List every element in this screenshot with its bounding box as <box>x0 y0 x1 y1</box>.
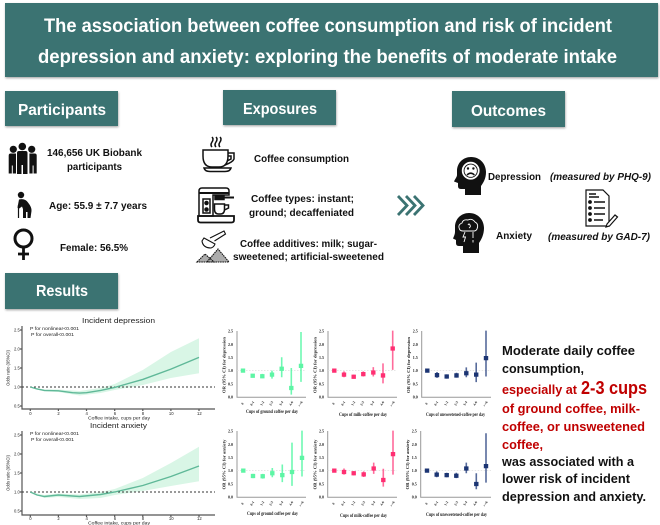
chart: unsweetened coffee, anxiety: 0-1 <box>433 500 439 506</box>
icon: scoop and sugar <box>197 231 229 262</box>
chart: unsweetened coffee, anxiety: 3-4 <box>462 500 468 506</box>
conclusion text block: consumption, <box>502 361 584 376</box>
chart: milk coffee, anxiety: 2.5 <box>319 428 324 434</box>
chart: incident anxiety spline: 10 <box>169 516 174 521</box>
text: PHQ-9 measure: (measured by PHQ-9) <box>550 172 652 183</box>
text: depression: Depression <box>488 172 541 183</box>
chart: unsweetened coffee, anxiety: OR (95% CI) for anxiety <box>405 439 410 490</box>
chart: unsweetened coffee, anxiety <box>405 428 491 518</box>
chart: incident depression spline: 2.5 <box>14 328 20 332</box>
conclusion text block: of ground coffee, milk- <box>502 401 640 416</box>
text: anxiety: Anxiety <box>496 231 532 242</box>
heading: outcomes <box>452 91 565 127</box>
chart: milk coffee, anxiety: 0-1 <box>340 500 346 506</box>
chart: incident anxiety spline: 4 <box>86 516 88 521</box>
chart: ground coffee, anxiety: OR (95% CI) for anxiety <box>222 439 227 490</box>
chart: milk coffee, depression: 0 <box>331 402 336 406</box>
conclusion text block: coffee, or unsweetened <box>502 419 645 434</box>
chart: ground coffee, anxiety: 2.0 <box>228 442 233 447</box>
chart: incident anxiety spline: 6 <box>114 516 117 521</box>
chart: unsweetened coffee, depression: 1.5 <box>413 355 418 360</box>
chart: incident depression spline: 2 <box>57 411 60 416</box>
chart: incident depression spline: 10 <box>169 411 174 416</box>
chart: unsweetened coffee, depression: OR (95% CI) for depression <box>406 336 411 393</box>
chart: ground coffee, depression: 0.0 <box>228 395 233 400</box>
text: age: Age: 55.9 ± 7.7 years <box>49 201 147 212</box>
chart: unsweetened coffee, anxiety: Cups of unsweetened-coffee per day <box>426 512 487 518</box>
conclusion text block: lower risk of incident <box>502 471 631 486</box>
chart: ground coffee, depression: >=6 <box>297 400 304 408</box>
chart: unsweetened coffee, depression: 0.0 <box>413 395 418 400</box>
chart: incident depression spline <box>6 316 215 420</box>
heading: exposures <box>223 90 336 125</box>
chart: incident anxiety spline: 1.0 <box>14 490 20 494</box>
chart: ground coffee, depression: 0.5 <box>228 381 233 386</box>
chart: ground coffee, depression: OR (95% CI) for depression <box>222 336 227 393</box>
chart: incident depression spline: P for overall<0.001 <box>31 332 75 337</box>
chart: milk coffee, anxiety: 0 <box>331 502 336 506</box>
chart: milk coffee, anxiety: 4-6 <box>379 500 385 506</box>
chart: ground coffee, depression: 3-4 <box>278 400 284 406</box>
chart: incident anxiety spline: P for nonlinear<0.001 <box>30 431 80 436</box>
chart: milk coffee, depression <box>312 328 397 418</box>
chart: incident depression spline: Odds ratio (95%CI) <box>6 349 10 386</box>
chart: milk coffee, depression: 3-4 <box>369 400 375 406</box>
chart: unsweetened coffee, depression: 2.5 <box>413 328 418 334</box>
chart: unsweetened coffee, anxiety: >=6 <box>482 500 489 508</box>
chart: unsweetened coffee, anxiety: 2-3 <box>453 500 459 506</box>
chart: incident depression spline: 4 <box>86 411 88 416</box>
chart: incident depression spline: 2.0 <box>14 346 20 352</box>
chart: unsweetened coffee, depression: 3-4 <box>462 400 468 406</box>
chart: milk coffee, anxiety: OR (95% CI) for anxiety <box>312 439 318 490</box>
chart: milk coffee, depression: 2-3 <box>359 400 365 406</box>
chart: ground coffee, depression: 2-3 <box>268 400 274 406</box>
chart: milk coffee, anxiety: 2.0 <box>319 442 324 447</box>
chart: incident anxiety spline: 0 <box>29 516 32 521</box>
chart title: incident depression: Incident depression <box>82 316 155 325</box>
text: participants count: 146,656 UK Biobank <box>47 148 142 159</box>
chart: unsweetened coffee, depression: 0 <box>424 402 429 406</box>
icon: espresso machine <box>198 188 234 222</box>
chart: incident anxiety spline <box>6 421 215 525</box>
text: coffee additives: Coffee additives: milk; sugar- <box>240 239 377 250</box>
title banner: The association between coffee consumption and risk of incident <box>44 16 613 37</box>
chart: ground coffee, depression: 1.0 <box>228 368 233 373</box>
chart: milk coffee, depression: 0-1 <box>340 400 346 406</box>
chart: incident depression spline: P for nonlinear<0.001 <box>30 326 80 331</box>
conclusion text block: especially at <box>502 382 578 397</box>
chart: unsweetened coffee, anxiety: 1-2 <box>443 500 449 506</box>
chart: milk coffee, anxiety: 1.5 <box>319 455 324 460</box>
chart: milk coffee, anxiety: 3-4 <box>370 500 376 506</box>
chart: incident anxiety spline: P for overall<0.001 <box>31 437 75 442</box>
chart: incident depression spline: Coffee intake, cups per day <box>88 416 151 420</box>
chart: milk coffee, anxiety: 1-2 <box>350 500 356 506</box>
chart: ground coffee, depression: 4-6 <box>288 400 294 406</box>
chart: unsweetened coffee, anxiety: 1.0 <box>412 468 417 473</box>
text: coffee types: ground; decaffeniated <box>249 208 354 219</box>
chart: unsweetened coffee, depression: 0-1 <box>433 400 439 406</box>
chart: unsweetened coffee, depression: Cups of unsweetened-coffee per day <box>426 412 485 418</box>
chart: ground coffee, depression: 0 <box>240 402 245 406</box>
chart: ground coffee, depression <box>222 328 306 415</box>
chart: incident anxiety spline: Odds ratio (95%CI) <box>6 454 10 491</box>
text: coffee additives <box>233 239 384 263</box>
conclusion text block: coffee, <box>502 437 543 452</box>
chart: milk coffee, depression: 2.0 <box>319 342 324 347</box>
title banner <box>5 3 658 77</box>
chart: incident anxiety spline: 8 <box>142 516 145 521</box>
chart: milk coffee, depression: 2.5 <box>319 328 324 334</box>
chart: ground coffee, anxiety: >=6 <box>298 500 305 508</box>
chart: incident depression spline: 8 <box>142 411 145 416</box>
chart: incident anxiety spline: 2.0 <box>14 452 20 456</box>
chart: milk coffee, depression: 0.5 <box>319 381 324 386</box>
chart: unsweetened coffee, depression: 1-2 <box>443 400 449 406</box>
chart: milk coffee, depression: OR (95% CI) for depression <box>312 336 318 393</box>
chart: milk coffee, depression: 0.0 <box>319 395 324 400</box>
conclusion text block <box>501 343 647 504</box>
text: coffee additives: sweetened; artificial-sweetened <box>233 252 384 263</box>
icon: group of people <box>9 143 37 174</box>
chart: milk coffee, depression: 1-2 <box>350 400 356 406</box>
title banner: depression and anxiety: exploring the benefits of moderate intake <box>38 47 617 68</box>
chart: ground coffee, anxiety: 0.5 <box>228 481 233 486</box>
chart: ground coffee, anxiety: 0 <box>240 502 245 506</box>
heading: results <box>5 273 118 309</box>
chart: unsweetened coffee, anxiety: 1.5 <box>412 455 417 460</box>
text: coffee types: Coffee types: instant; <box>251 194 354 205</box>
text: participants count <box>47 148 142 173</box>
chart: ground coffee, anxiety: 4-6 <box>288 500 294 506</box>
chart: ground coffee, depression: 1.5 <box>228 355 233 360</box>
chart: ground coffee, anxiety: 2-3 <box>268 500 274 506</box>
chart: unsweetened coffee, depression: 2-3 <box>453 400 459 406</box>
chart: incident anxiety spline: 1.5 <box>14 470 20 476</box>
chart: unsweetened coffee, depression: 2.0 <box>413 342 418 347</box>
chart: ground coffee, depression: 2.5 <box>228 328 233 334</box>
conclusion text block: 2-3 cups <box>581 378 647 398</box>
chart: unsweetened coffee, depression <box>406 328 491 418</box>
conclusion text block: Moderate daily coffee <box>502 343 635 358</box>
chart: unsweetened coffee, anxiety: 0 <box>424 502 429 506</box>
chart: ground coffee, anxiety <box>222 428 306 517</box>
chart: ground coffee, depression: 2.0 <box>228 342 233 347</box>
chart: unsweetened coffee, anxiety: 4-6 <box>472 500 478 506</box>
chart: incident anxiety spline: 2.5 <box>14 432 20 438</box>
chart: ground coffee, anxiety: 1-2 <box>259 500 265 506</box>
conclusion text block: depression and anxiety. <box>502 489 646 504</box>
chart: incident anxiety spline: 0.5 <box>14 508 20 514</box>
heading: participants <box>5 91 118 126</box>
chart: unsweetened coffee, depression: 0.5 <box>413 381 418 386</box>
chart: milk coffee, anxiety: 1.0 <box>319 468 324 473</box>
heading: outcomes: Outcomes <box>471 103 546 120</box>
chart: ground coffee, depression: 0-1 <box>249 400 255 406</box>
heading: participants: Participants <box>18 102 106 119</box>
icon: questionnaire document <box>586 190 618 227</box>
chart: milk coffee, depression: >=6 <box>389 400 396 408</box>
chart: incident anxiety spline: 12 <box>197 516 202 521</box>
chart: unsweetened coffee, anxiety: 0.5 <box>412 481 417 486</box>
chart: unsweetened coffee, depression: 4-6 <box>472 400 478 406</box>
chart: ground coffee, anxiety: 1.0 <box>228 468 233 473</box>
chart: incident depression spline: 12 <box>197 411 202 416</box>
text: coffee types <box>249 194 354 219</box>
icon: female symbol <box>15 230 32 260</box>
chart: milk coffee, depression: 1.5 <box>319 355 324 360</box>
heading: exposures: Exposures <box>243 101 317 118</box>
chart: ground coffee, anxiety: 0-1 <box>249 500 255 506</box>
chart: milk coffee, depression: 1.0 <box>319 368 324 373</box>
chart: incident depression spline: 0 <box>29 411 32 416</box>
chart: milk coffee, anxiety <box>312 428 397 519</box>
chart: ground coffee, anxiety: 1.5 <box>228 455 233 460</box>
chart: ground coffee, depression: Cups of ground coffee per day <box>246 409 298 415</box>
chart: unsweetened coffee, anxiety: 2.0 <box>412 442 417 447</box>
text: GAD-7 measure: (measured by GAD-7) <box>548 232 651 243</box>
chart: milk coffee, anxiety: >=6 <box>389 500 396 508</box>
chart: ground coffee, anxiety: 2.5 <box>228 428 233 434</box>
icon: elderly person with cane <box>18 192 32 218</box>
chart: unsweetened coffee, anxiety: 0.0 <box>412 495 417 500</box>
text: female share: Female: 56.5% <box>60 243 128 254</box>
chart: milk coffee, anxiety: 2-3 <box>360 500 366 506</box>
chart: milk coffee, anxiety: 0.0 <box>319 495 324 500</box>
heading: results: Results <box>36 283 88 300</box>
chart: ground coffee, anxiety: 3-4 <box>278 500 284 506</box>
chart: incident depression spline: 6 <box>114 411 117 416</box>
chart: incident anxiety spline: 2 <box>57 516 60 521</box>
chart: ground coffee, anxiety: 0.0 <box>228 495 233 500</box>
chart: incident depression spline: 1.0 <box>14 384 20 390</box>
chart: unsweetened coffee, depression: 1.0 <box>413 368 418 373</box>
chart title: incident anxiety: Incident anxiety <box>90 421 147 430</box>
arrow: chevrons <box>398 196 423 215</box>
chart: incident depression spline: 0.5 <box>14 404 20 408</box>
text: coffee consumption: Coffee consumption <box>254 154 349 165</box>
conclusion text block: was associated with a <box>501 454 635 469</box>
chart: ground coffee, depression: 1-2 <box>259 400 265 406</box>
chart: ground coffee, anxiety: Cups of ground coffee per day <box>247 511 298 517</box>
chart: unsweetened coffee, anxiety: 2.5 <box>412 428 417 434</box>
chart: incident depression spline: 1.5 <box>14 366 20 370</box>
chart: milk coffee, depression: 4-6 <box>379 400 385 406</box>
icon: anxiety head <box>453 213 484 253</box>
text: participants count: participants <box>67 162 122 173</box>
chart: milk coffee, depression: Cups of milk-coffee per day <box>339 412 387 418</box>
chart: milk coffee, anxiety: 0.5 <box>319 481 324 486</box>
icon: depression head <box>454 157 486 195</box>
chart: unsweetened coffee, depression: >=6 <box>482 400 489 408</box>
chart: milk coffee, anxiety: Cups of milk-coffee per day <box>340 513 387 519</box>
icon: coffee cup <box>203 137 234 172</box>
